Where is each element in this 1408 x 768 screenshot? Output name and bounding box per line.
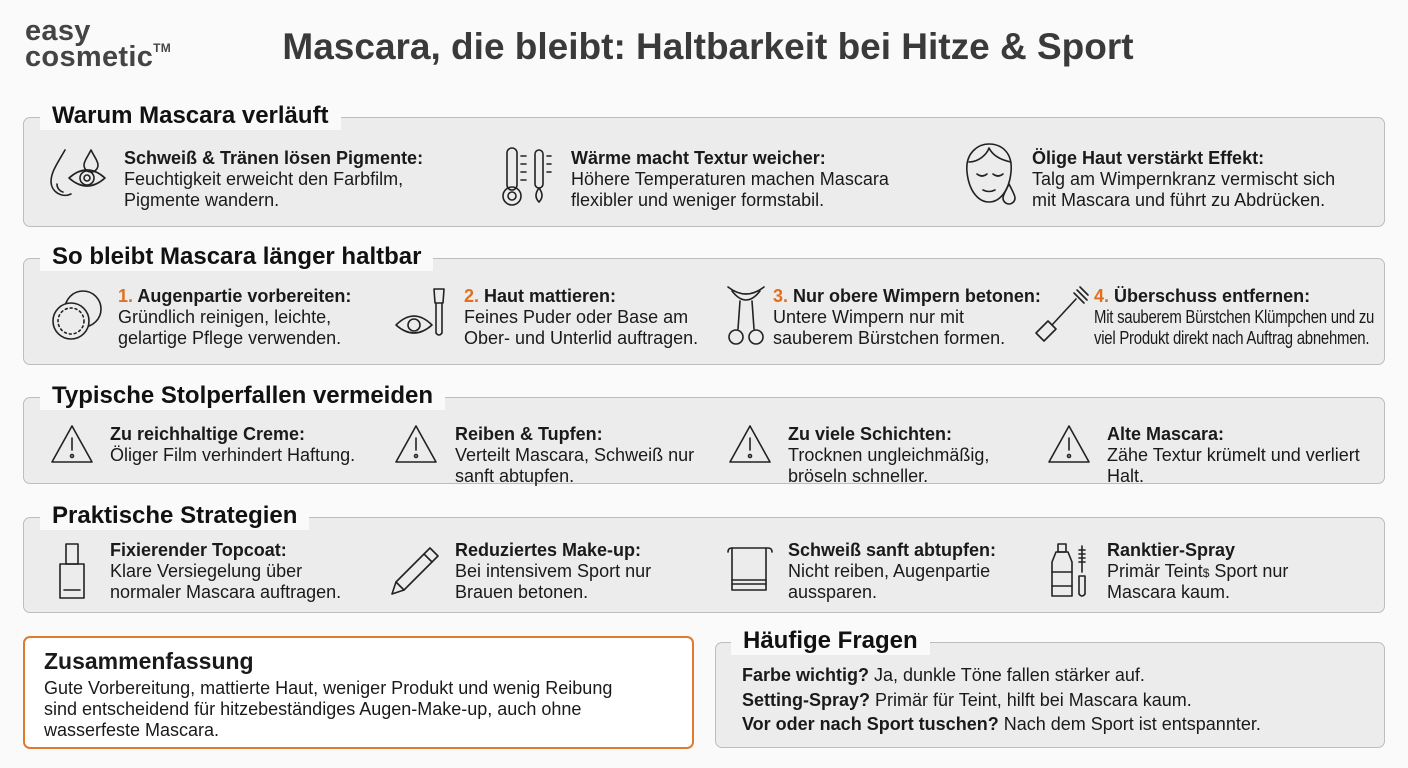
text: step 2: Feines Puder oder Base am: [464, 307, 688, 327]
icon: face: [966, 143, 1016, 205]
text: step 4: Mit sauberem Bürstchen Klümpchen und zu: [1094, 307, 1374, 327]
text: step 1: 1. Augenpartie vorbereiten:: [118, 286, 351, 306]
text: strategy 1: Klare Versiegelung über: [110, 561, 302, 581]
text: summary: sind entscheidend für hitzebeständiges Augen-Make-up, auch ohne: [44, 699, 581, 719]
text: cause 1: Pigmente wandern.: [124, 190, 279, 210]
text: faq: [742, 665, 1261, 734]
panel: Warum Mascara verläuft: [23, 117, 1385, 227]
icon: curler: [727, 286, 765, 345]
text: pitfall 3: [788, 424, 989, 486]
text: faq: Farbe wichtig? Ja, dunkle Töne fallen stärker auf.: [742, 665, 1145, 685]
text: cause 2: Wärme macht Textur weicher:: [571, 148, 826, 168]
icon: drop eye: [50, 149, 106, 196]
text: cause 3: [1032, 148, 1335, 210]
text: step 2: Ober- und Unterlid auftragen.: [464, 328, 698, 348]
text: cause 1: Feuchtigkeit erweicht den Farbfilm,: [124, 169, 403, 189]
panel: Stolperfallen: [23, 397, 1385, 484]
panel: So bleibt Mascara: [23, 258, 1385, 365]
text: strategy 4: Ranktier-Spray: [1107, 540, 1235, 560]
logo: [25, 15, 171, 73]
text: pitfall 4: [1107, 424, 1360, 486]
title: Mascara, die bleibt: Haltbarkeit bei Hitze & Sport: [282, 26, 1134, 67]
text: pitfall 1: [110, 424, 355, 465]
heading: Zusammenfassung: Zusammenfassung: [44, 648, 254, 674]
text: pitfall 3: Trocknen ungleichmäßig,: [788, 445, 989, 465]
icon: warning 2: [395, 425, 437, 463]
text: strategy 2: Reduziertes Make-up:: [455, 540, 641, 560]
text: step 2: 2. Haut mattieren:: [464, 286, 616, 306]
text: step 1: gelartige Pflege verwenden.: [118, 328, 341, 348]
text: cause 1: [124, 148, 423, 210]
text: faq: Setting-Spray? Primär für Teint, hilft bei Mascara kaum.: [742, 690, 1192, 710]
heading: Häufige Fragen: Häufige Fragen: [743, 627, 918, 654]
text: strategy 1: Fixierender Topcoat:: [110, 540, 287, 560]
text: strategy 3: Schweiß sanft abtupfen:: [788, 540, 996, 560]
icon: towel: [727, 547, 773, 591]
text: cause 2: Höhere Temperaturen machen Mascara: [571, 169, 889, 189]
text: pitfall 1: Zu reichhaltige Creme:: [110, 424, 305, 444]
icon: pencil: [391, 547, 439, 595]
text: strategy 4: Primär Teint$ Sport nur: [1107, 561, 1288, 581]
panel: Strategien: [23, 517, 1385, 613]
text: pitfall 2: Verteilt Mascara, Schweiß nur: [455, 445, 694, 465]
logo: easy: [25, 15, 91, 47]
text: pitfall 3: Zu viele Schichten:: [788, 424, 952, 444]
text: step 4: 4. Überschuss entfernen:: [1094, 286, 1310, 306]
text: cause 1: Schweiß & Tränen lösen Pigmente:: [124, 148, 423, 168]
icon: warning 3: [729, 425, 771, 463]
text: step 1: Gründlich reinigen, leichte,: [118, 307, 331, 327]
text: step 2: [464, 286, 698, 348]
text: strategy 1: normaler Mascara auftragen.: [110, 582, 341, 602]
text: step 4: [1094, 286, 1374, 348]
text: summary: Gute Vorbereitung, mattierte Haut, weniger Produkt und wenig Reibung: [44, 678, 612, 698]
text: strategy 4: [1107, 540, 1288, 602]
icon: eye brush: [395, 288, 445, 336]
text: strategy 2: Bei intensivem Sport nur: [455, 561, 651, 581]
text: pitfall 2: [455, 424, 694, 486]
heading: Stolperfallen: Typische Stolperfallen vermeiden: [52, 382, 433, 409]
text: pitfall 1: Öliger Film verhindert Haftung.: [110, 445, 355, 465]
text: pitfall 3: bröseln schneller.: [788, 466, 928, 486]
text: cause 3: mit Mascara und führt zu Abdrücken.: [1032, 190, 1325, 210]
text: step 3: [773, 286, 1041, 348]
heading: Strategien: Praktische Strategien: [52, 502, 297, 529]
text: step 4: viel Produkt direkt nach Auftrag abnehmen.: [1094, 328, 1369, 348]
text: pitfall 4: Zähe Textur krümelt und verliert: [1107, 445, 1360, 465]
text: strategy 2: [455, 540, 651, 602]
icon: warning 1: [51, 425, 93, 463]
text: strategy 2: Brauen betonen.: [455, 582, 588, 602]
text: summary: wasserfeste Mascara.: [44, 720, 219, 740]
panel: Häufige Fragen: [715, 642, 1385, 748]
heading: Warum: Warum Mascara verläuft: [52, 102, 329, 129]
text: summary: [44, 678, 612, 740]
text: cause 3: Ölige Haut verstärkt Effekt:: [1032, 148, 1264, 168]
icon: warning 4: [1048, 425, 1090, 463]
text: strategy 3: [788, 540, 996, 602]
text: strategy 4: Mascara kaum.: [1107, 582, 1230, 602]
text: step 3: sauberem Bürstchen formen.: [773, 328, 1005, 348]
text: faq: Vor oder nach Sport tuschen? Nach dem Sport ist entspannter.: [742, 714, 1261, 734]
text: step 1: [118, 286, 351, 348]
icon: mascara wand: [1035, 286, 1089, 342]
text: strategy 3: aussparen.: [788, 582, 877, 602]
text: cause 2: flexibler und weniger formstabil.: [571, 190, 824, 210]
panel: Zusammenfassung: [23, 636, 694, 749]
heading: So bleibt: So bleibt Mascara länger haltbar: [52, 243, 421, 270]
text: pitfall 4: Alte Mascara:: [1107, 424, 1224, 444]
icon: cotton pads: [52, 290, 102, 340]
icon: spray and mascara: [1051, 543, 1086, 597]
text: cause 3: Talg am Wimpernkranz vermischt sich: [1032, 169, 1335, 189]
icon: nail polish: [59, 543, 85, 599]
text: cause 2: [571, 148, 889, 210]
text: strategy 1: [110, 540, 341, 602]
text: pitfall 2: sanft abtupfen.: [455, 466, 574, 486]
text: strategy 3: Nicht reiben, Augenpartie: [788, 561, 990, 581]
text: step 3: 3. Nur obere Wimpern betonen:: [773, 286, 1041, 306]
text: pitfall 2: Reiben & Tupfen:: [455, 424, 603, 444]
logo: cosmeticTM: [25, 41, 171, 73]
text: pitfall 4: Halt.: [1107, 466, 1144, 486]
icon: thermometers: [502, 147, 552, 206]
text: step 3: Untere Wimpern nur mit: [773, 307, 964, 327]
